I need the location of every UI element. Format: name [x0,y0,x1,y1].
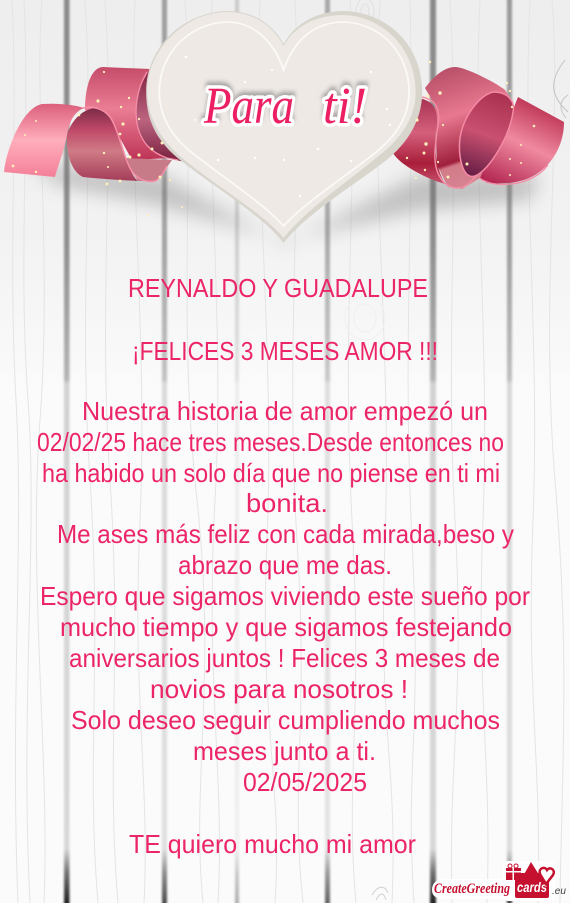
inner loop [460,92,513,176]
love story paragraph: ha habido un solo día que no piense en ti mi [42,458,500,488]
title: Para ti! [203,74,367,135]
left ribbon [4,67,200,181]
logo: CreateGreetingCards.eu: CreateGreeting [434,881,510,897]
love story paragraph [37,396,530,766]
gift icon [505,864,522,880]
title: Para ti!: ti! [323,78,367,135]
love story paragraph: mucho tiempo y que sigamos festejando [60,612,512,642]
date: 02/05/2025 [243,767,367,797]
love story paragraph: novios para nosotros ! [150,674,408,704]
inner shaded face [136,69,200,162]
right ribbon [393,67,564,189]
title: Para ti!: Para [203,74,294,131]
love story paragraph: Solo deseo seguir cumpliendo muchos [71,705,500,735]
names line: REYNALDO Y GUADALUPE [128,273,428,303]
tree icon [522,862,541,878]
closing line: TE quiero mucho mi amor [129,829,416,859]
logo: CreateGreetingCards.eu [432,861,566,901]
heart icon [540,868,554,884]
wood knots [345,0,568,900]
love story paragraph: aniversarios juntos ! Felices 3 meses de [69,643,500,673]
love story paragraph: 02/02/25 hace tres meses.Desde entonces no [37,427,504,457]
love story paragraph: Me ases más feliz con cada mirada,beso y [57,519,514,549]
love story paragraph: Espero que sigamos viviendo este sueño por [40,581,530,611]
logo: CreateGreetingCards.eu: cards [517,879,547,895]
middle fold [67,108,138,181]
love story paragraph: meses junto a ti. [193,736,376,766]
title: Para ti!: ti! [323,74,367,131]
pale outer strip [4,104,84,177]
main band [425,67,513,189]
heart [146,11,422,243]
title: Para ti!: Para [203,78,294,135]
sparkles [12,61,535,216]
lower fold [125,158,172,181]
left face [393,98,445,184]
love story paragraph: Nuestra historia de amor empezó un [82,396,488,426]
logo: CreateGreetingCards.eu: .eu [552,886,566,897]
outer end [470,97,564,183]
love story paragraph: abrazo que me das. [178,550,392,580]
love story paragraph: bonita. [246,488,328,518]
message text [37,273,530,859]
greeting line: ¡FELICES 3 MESES AMOR !!! [132,336,438,366]
back loop [85,67,170,160]
ribbon and heart shadow [30,165,540,245]
